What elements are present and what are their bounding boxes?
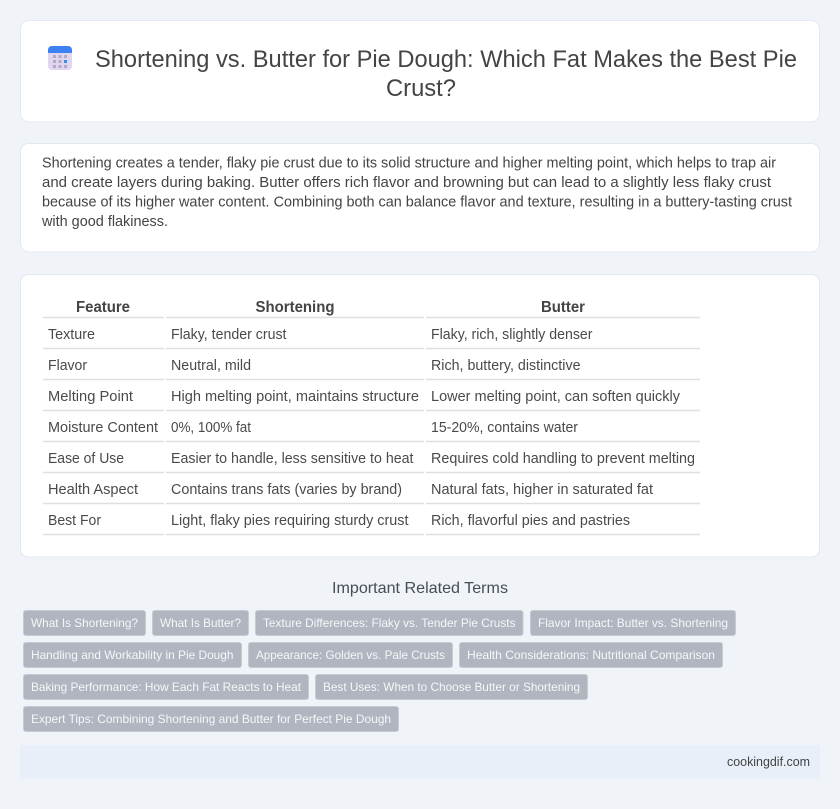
row: moisture content: 15-20%, contains water (431, 420, 578, 436)
text block: summary (41, 156, 792, 230)
row: ease of use: Easier to handle, less sensitive to heat (171, 451, 414, 467)
row: best for (48, 513, 630, 529)
text block: summary: Shortening creates a tender, flaky pie crust due to its solid structure and higher melting point, which helps to trap air (42, 156, 776, 172)
panel: related term tags: What Is Shortening? (31, 616, 138, 630)
row: flavor: Rich, buttery, distinctive (431, 358, 580, 374)
panel: related term tags: Best Uses: When to Choose Butter or Shortening (323, 680, 580, 694)
panel: title header (20, 20, 820, 122)
table header (76, 299, 585, 316)
row: melting point: Melting Point (48, 389, 133, 405)
row: flavor: Neutral, mild (171, 358, 251, 374)
row: health aspect: Natural fats, higher in saturated fat (431, 482, 653, 498)
row: moisture content: 0%, 100% fat (171, 420, 251, 436)
panel: comparison table (20, 274, 820, 557)
row: best for: Rich, flavorful pies and pastries (431, 513, 630, 529)
panel: related term tags: Baking Performance: How Each Fat Reacts to Heat (31, 680, 302, 694)
row: texture: Flaky, rich, slightly denser (431, 327, 593, 343)
text block: summary: with good flakiness. (41, 214, 168, 230)
row: ease of use: Ease of Use (48, 451, 124, 467)
row: melting point (48, 389, 681, 405)
footer (20, 745, 820, 779)
table header: Feature (76, 299, 130, 316)
row: health aspect: Contains trans fats (varies by brand) (171, 482, 402, 498)
row: best for: Best For (48, 513, 101, 529)
row: flavor (48, 358, 580, 374)
row: texture: Flaky, tender crust (171, 327, 287, 343)
panel: summary paragraph (20, 144, 820, 252)
icon: calendar (48, 46, 72, 70)
row: moisture content: Moisture Content (48, 420, 158, 436)
row: flavor: Flavor (48, 358, 87, 374)
text block: summary: because of its higher water content. Combining both can balance flavor and texture, resulting in a buttery-tasting crust (42, 195, 792, 211)
row: ease of use: Requires cold handling to prevent melting (431, 451, 695, 467)
panel: related term tags (24, 610, 736, 732)
title: Shortening vs. Butter for Pie Dough: Which Fat Makes the Best Pie (95, 46, 797, 73)
table header: Shortening (256, 299, 334, 316)
panel: related term tags: Handling and Workability in Pie Dough (31, 648, 234, 662)
row: texture: Texture (48, 327, 95, 343)
row: best for: Light, flaky pies requiring sturdy crust (171, 513, 408, 529)
row: health aspect (48, 482, 653, 498)
table rules (43, 318, 700, 534)
row: texture (48, 327, 593, 343)
row: health aspect: Health Aspect (48, 482, 138, 498)
panel: related term tags: Expert Tips: Combining Shortening and Butter for Perfect Pie Dough (31, 712, 391, 726)
row: moisture content (48, 420, 578, 436)
title (95, 46, 797, 102)
row: melting point: Lower melting point, can soften quickly (431, 389, 681, 405)
panel: related term tags: Texture Differences: Flaky vs. Tender Pie Crusts (263, 616, 516, 630)
panel: related term tags: Health Considerations: Nutritional Comparison (467, 648, 715, 662)
title: Crust? (386, 75, 456, 102)
table header: Butter (541, 299, 585, 316)
panel: related term tags: What Is Butter? (160, 616, 241, 630)
panel: related term tags: Flavor Impact: Butter vs. Shortening (538, 616, 728, 630)
heading: related terms: Important Related Terms (332, 580, 508, 597)
text block: summary: and create layers during baking. Butter offers rich flavor and browning but can lead to a slightly less flaky crust (42, 175, 771, 191)
row: melting point: High melting point, maintains structure (171, 389, 419, 405)
panel: related term tags: Appearance: Golden vs. Pale Crusts (256, 648, 445, 662)
footer: cookingdif.com (727, 755, 810, 769)
row: ease of use (48, 451, 695, 467)
